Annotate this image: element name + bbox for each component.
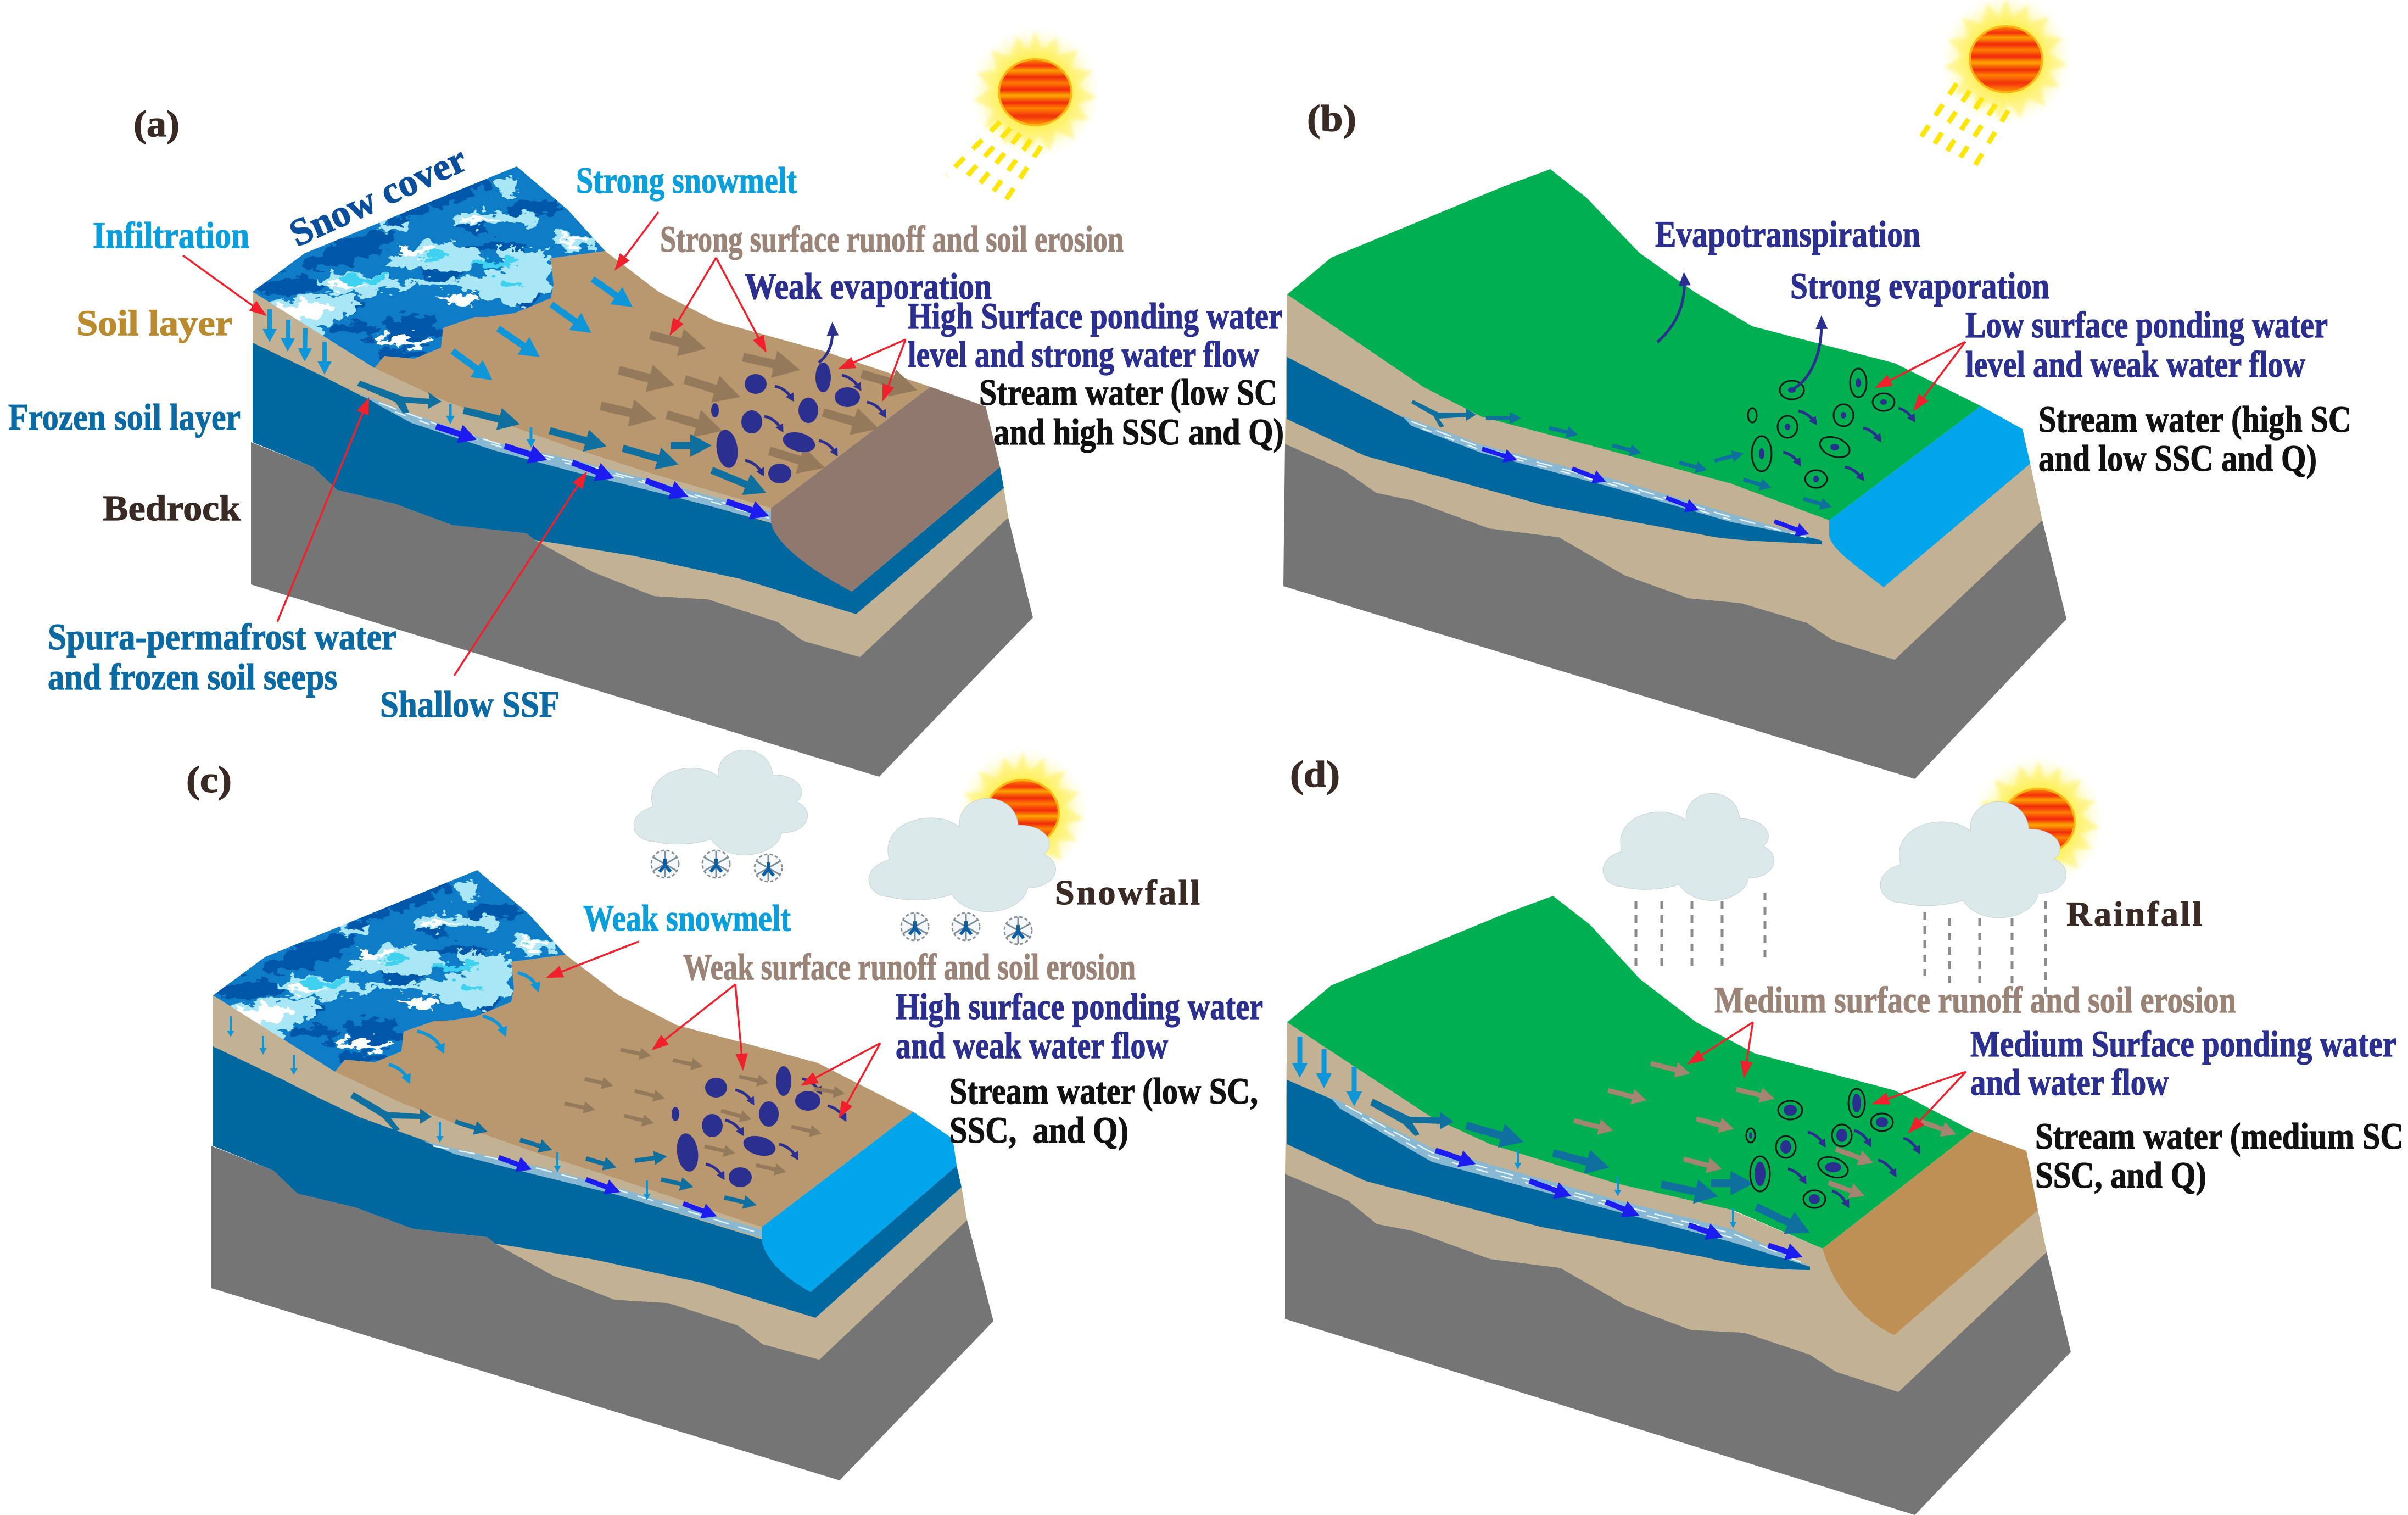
panel d: rainfall: [1285, 753, 2404, 1515]
bedrock layer: [251, 442, 1033, 777]
label stream water: [949, 1070, 1258, 1151]
bedrock layer: [1283, 444, 2066, 779]
shallow water lens: [422, 1140, 762, 1238]
upper soil layer: [213, 995, 762, 1242]
label strong snowmelt: Strong snowmelt: [576, 159, 797, 201]
snow cover texture: [253, 166, 605, 368]
sun: [1940, 0, 2072, 125]
soil layer: [1285, 294, 2042, 660]
infiltration arrows: [231, 1016, 294, 1073]
lower soil layer: [495, 1187, 967, 1360]
label ponding water: [896, 985, 1263, 1066]
strong evaporation arrow: [1791, 321, 1822, 390]
bedrock layer: [211, 1146, 993, 1480]
label ponding water: level and weak water flow: [1965, 343, 2305, 385]
label snow cover: Snow cover: [283, 138, 473, 255]
label soil layer: Soil layer: [76, 303, 232, 343]
upper soil layer: [253, 292, 771, 525]
label ponding water: [908, 295, 1282, 375]
frozen soil lens: [1287, 1080, 1810, 1270]
red leader arrows: [1689, 1022, 1966, 1132]
panel label b: (b): [1307, 97, 1356, 139]
red leader arrows: [183, 212, 906, 676]
label stream water: Stream water (low SC: [979, 371, 1277, 413]
sun: [969, 26, 1101, 158]
shallow water lens: [1402, 416, 1822, 540]
sun rays: [946, 122, 1041, 205]
small ponds: [1746, 1089, 1893, 1208]
label bedrock: Bedrock: [103, 488, 241, 528]
label ponding water: [1965, 304, 2328, 385]
panel c: snowfall: [186, 747, 1263, 1480]
block diagram base: [191, 852, 993, 1480]
red leader arrows: [547, 942, 880, 1117]
shallow water lens: [1329, 1096, 1810, 1267]
small downward seep arrows: [450, 404, 531, 445]
bedrock layer: [1285, 1174, 2071, 1515]
label weak evaporation: Weak evaporation: [745, 265, 992, 307]
label ponding water: [1970, 1023, 2396, 1103]
shallow subsurface flow arrows: [1482, 449, 1805, 533]
label evapotranspiration: Evapotranspiration: [1655, 213, 1920, 255]
stream water: [762, 1112, 957, 1292]
panel a: strong snowmelt: [8, 26, 1284, 777]
soil surface: [375, 251, 930, 508]
label infiltration: Infiltration: [93, 214, 249, 256]
water flow squiggles: [745, 375, 885, 474]
stream water: [771, 387, 1000, 592]
label weak snowmelt: Weak snowmelt: [583, 897, 791, 939]
shallow subsurface flow arrows: [499, 1157, 712, 1215]
sun rays: [1917, 83, 2008, 171]
cloud right: [1880, 801, 2066, 918]
small downward seep arrows: [1518, 1149, 1733, 1226]
label stream water: SSC, and Q): [949, 1109, 1128, 1151]
snowmelt arrows: [452, 279, 627, 376]
label ponding water: High Surface ponding water: [908, 295, 1282, 337]
label stream water: [2035, 1115, 2404, 1196]
label ponding water: and water flow: [1970, 1061, 2169, 1103]
panel label d: (d): [1290, 753, 1340, 795]
label shallow SSF: Shallow SSF: [380, 683, 560, 725]
cloud left: [1603, 793, 1774, 900]
water flow squiggles: [1788, 1130, 1919, 1206]
seep arrows: [357, 381, 759, 490]
label snowfall: Snowfall: [1055, 873, 1200, 912]
label stream water: Stream water (low SC,: [949, 1070, 1258, 1112]
label ponding water: Low surface ponding water: [1965, 304, 2328, 346]
infiltration arrows: [1300, 1037, 1354, 1101]
rain: [1636, 893, 2046, 997]
surface runoff arrows: [1574, 1063, 1952, 1194]
label rainfall: Rainfall: [2066, 894, 2202, 933]
label stream water: and high SSC and Q): [993, 411, 1284, 453]
seep arrows: [350, 1092, 752, 1204]
lower soil layer: [535, 488, 1008, 657]
shallow subsurface flow arrows: [436, 426, 763, 514]
water flow squiggles: [706, 1079, 845, 1178]
frozen soil layer: [213, 1046, 962, 1318]
label surface runoff: Weak surface runoff and soil erosion: [683, 946, 1136, 988]
snow cover texture: [213, 870, 566, 1072]
label frozen soil layer: Frozen soil layer: [8, 396, 241, 438]
small ponds: [1748, 369, 1895, 488]
red leader arrows: [1876, 342, 1965, 410]
label ponding water: High surface ponding water: [896, 985, 1263, 1027]
surface runoff arrows: [565, 1050, 841, 1171]
label supra-permafrost water: and frozen soil seeps: [48, 656, 337, 698]
infiltration arrows: [270, 309, 325, 370]
vegetated surface: [1287, 169, 1981, 520]
label stream water: Stream water (high SC: [2038, 398, 2351, 440]
ponding water: [711, 363, 860, 483]
shallow water lens: [360, 393, 771, 522]
frozen soil lens: [1287, 357, 1822, 544]
weak snowmelt arrows: [389, 973, 538, 1081]
subsurface flow arrows: [1411, 400, 1828, 506]
cloud right: [869, 798, 1055, 912]
soil surface: [335, 955, 913, 1227]
label stream water: [2038, 398, 2351, 479]
label ponding water: and weak water flow: [896, 1024, 1168, 1066]
panel b: evapotranspiration: [1283, 0, 2351, 779]
ponding water: [672, 1066, 820, 1187]
subsurface flow arrows: [1370, 1099, 1803, 1229]
panel label c: (c): [186, 759, 232, 800]
vegetated surface: [1287, 896, 1973, 1249]
evaporation arrow: [819, 327, 833, 363]
panel label a: (a): [133, 103, 180, 144]
frozen soil layer: [253, 343, 1004, 614]
snowflakes: [651, 850, 1032, 944]
shallow subsurface flow arrows: [1435, 1150, 1797, 1255]
label supra-permafrost water: Spura-permafrost water: [48, 616, 396, 658]
label strong evaporation: Strong evaporation: [1790, 265, 2049, 307]
label stream water: and low SSC and Q): [2038, 437, 2317, 479]
stream water: [1823, 1131, 2038, 1335]
label ponding water: level and strong water flow: [908, 333, 1259, 375]
soil layer: [1285, 1022, 2047, 1392]
label stream water: [979, 371, 1284, 453]
small downward seep arrows: [440, 1122, 647, 1198]
label surface runoff: Medium surface runoff and soil erosion: [1714, 979, 2236, 1021]
sun behind cloud: [957, 747, 1088, 879]
label surface runoff: Strong surface runoff and soil erosion: [660, 218, 1124, 260]
surface runoff arrows: [601, 335, 909, 465]
evapotranspiration arrow: [1657, 277, 1684, 342]
sun behind cloud: [1973, 756, 2104, 888]
stream water: [1829, 406, 2030, 587]
water flow squiggles: [1783, 408, 1914, 479]
label supra-permafrost water: [48, 616, 396, 698]
cloud left: [634, 750, 808, 855]
label stream water: SSC, and Q): [2035, 1154, 2206, 1196]
